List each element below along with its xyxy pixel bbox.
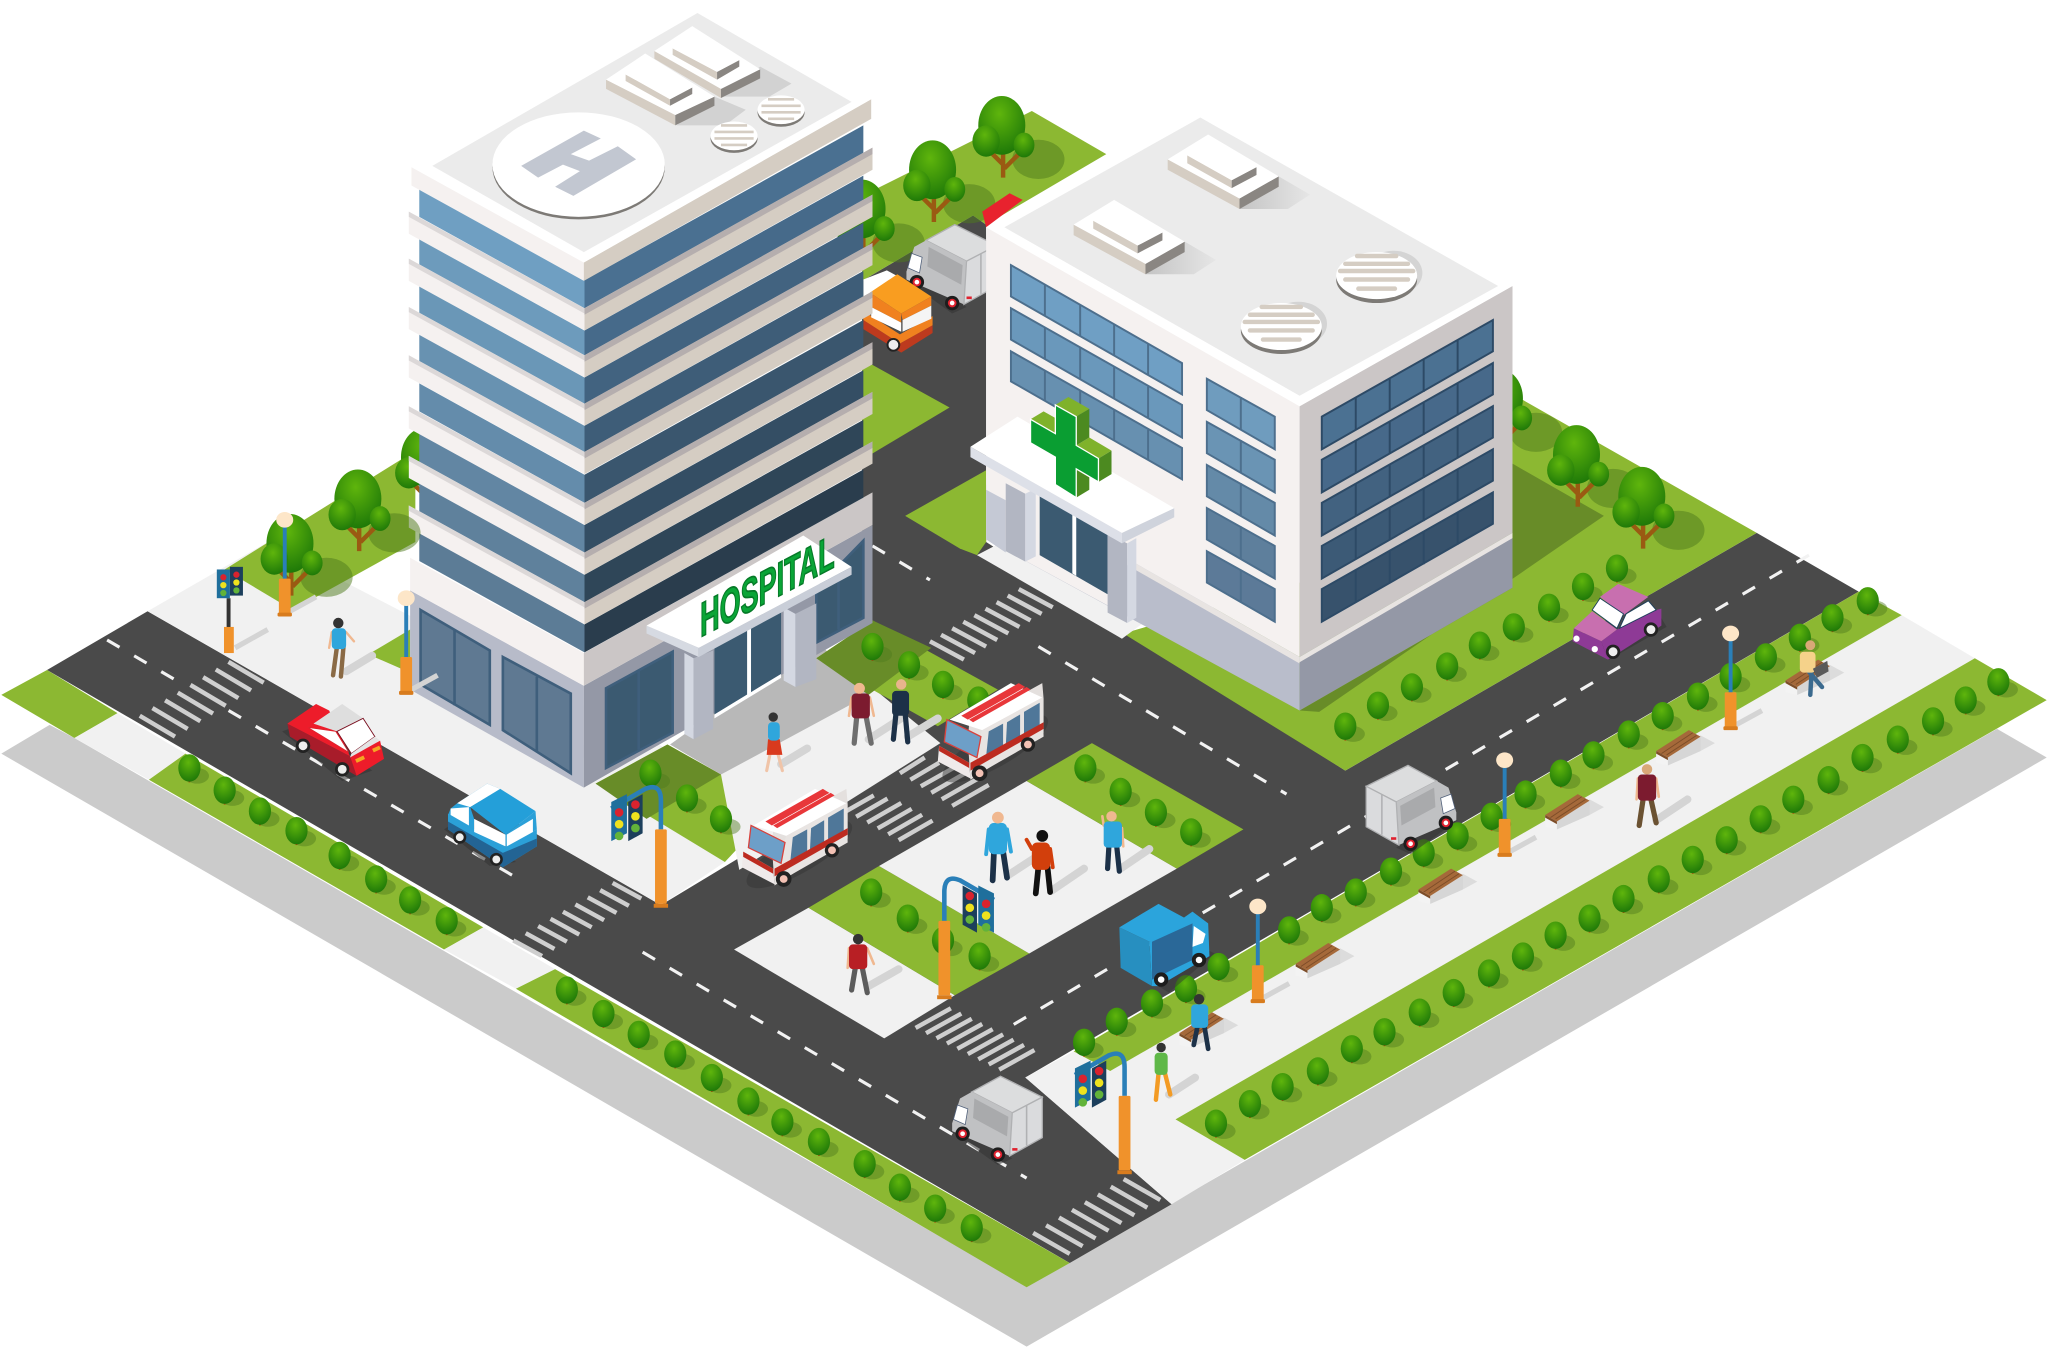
- large trees: [261, 425, 1704, 597]
- person: police officer: [892, 679, 938, 742]
- person: man in light blue: [986, 812, 1038, 880]
- road network: [47, 216, 1859, 1263]
- hospital clinic building: [970, 110, 1512, 711]
- clinic entrance doors: [986, 457, 1136, 623]
- vehicle: purple car: [1573, 584, 1667, 660]
- street lamps: [276, 512, 1762, 1003]
- shrubs: lower left road: [178, 754, 991, 1243]
- shrubs: central block: [639, 633, 1211, 972]
- crosswalks: [140, 589, 1160, 1254]
- left wall: [986, 227, 1300, 657]
- rooftop vents: [711, 95, 805, 153]
- person: man in maroon on pavement: [1637, 764, 1688, 825]
- vehicle: grey truck lower: [951, 1076, 1042, 1165]
- roof vent front: [1241, 302, 1327, 354]
- icon: green medical cross: [1031, 397, 1112, 498]
- hospital tower: [409, 8, 872, 788]
- lower right strips: [1025, 592, 2047, 1204]
- road markings: [107, 546, 1809, 1254]
- central block: [734, 743, 1243, 1038]
- person: seated on bench lower: [1191, 994, 1208, 1049]
- sign: HOSPITAL: HOSPITAL: [700, 523, 835, 648]
- platform side: [1, 725, 2047, 1347]
- vehicle: red car behind hospital: [982, 193, 1023, 227]
- tower base: [410, 590, 584, 788]
- roof vent rear: [1336, 251, 1422, 303]
- traffic lights: [611, 787, 1132, 1174]
- lower left strips: [1, 670, 1070, 1287]
- side windows: [1207, 379, 1275, 622]
- vehicle: blue van: [444, 784, 537, 867]
- rooftop units: [606, 26, 792, 125]
- people: [329, 618, 1829, 1100]
- right lawn: [1123, 392, 1757, 771]
- person: man in maroon: [849, 683, 901, 743]
- person: man in red: [848, 934, 899, 993]
- hospital forecourt: [148, 451, 998, 905]
- hospital canopy: [647, 536, 852, 657]
- tower ledges: [409, 148, 872, 624]
- rear trees: [395, 96, 1562, 511]
- person: man in orange: [1027, 830, 1084, 893]
- shrubs: lawn by clinic: [1334, 554, 1637, 742]
- clinic canopy: [970, 417, 1174, 543]
- vehicle: grey truck right: [1366, 765, 1458, 854]
- left windows: [1011, 265, 1182, 479]
- person: man on phone: [1102, 811, 1149, 871]
- ground floor windows: [421, 541, 863, 773]
- tower entrance doors: [684, 603, 816, 739]
- person: woman in red skirt: [767, 712, 807, 771]
- right windows: [1322, 320, 1493, 622]
- tower roof: [411, 8, 871, 281]
- roof: [986, 110, 1512, 406]
- person: man in blue, left pavement: [329, 618, 372, 677]
- helipad: [492, 112, 665, 219]
- vehicle: orange van: [863, 270, 933, 353]
- benches: [1179, 660, 1844, 1048]
- small traffic light: [217, 567, 268, 653]
- person: woman in green: [1155, 1043, 1195, 1100]
- person: seated on bench upper: [1800, 640, 1829, 695]
- ambulance upper: [934, 683, 1056, 794]
- roof unit left: [1074, 200, 1216, 274]
- roof unit right: [1168, 135, 1310, 209]
- clinic ground and entrance: [977, 541, 1147, 639]
- tower floors glass: [419, 125, 863, 652]
- vehicle: grey truck behind: [905, 225, 997, 313]
- ambulance lower: [738, 789, 861, 900]
- vehicle: red car: [282, 704, 384, 781]
- vehicle: blue truck: [1119, 904, 1215, 993]
- rear lawns: [862, 111, 1106, 555]
- shrubs: right strips: [1073, 587, 2018, 1139]
- right wall: [1300, 286, 1512, 657]
